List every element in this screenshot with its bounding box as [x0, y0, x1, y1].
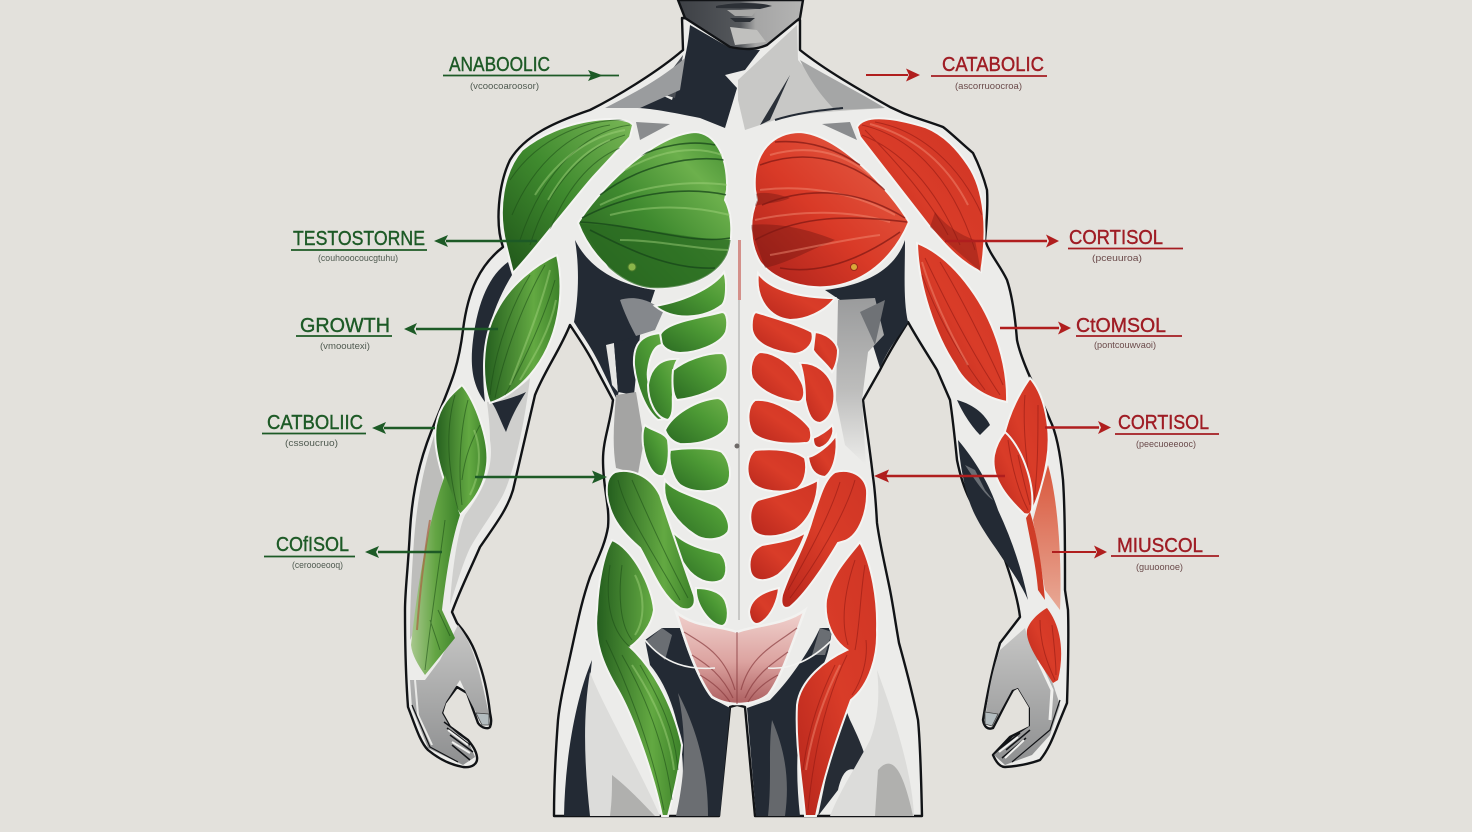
head — [678, 0, 803, 49]
label: Testostorne: TESTOSTORNE — [293, 228, 425, 250]
shading: torso — [574, 240, 908, 474]
label: Cortisol lower right — [1045, 412, 1219, 450]
label: Catbolic — [262, 412, 435, 449]
body silhouette — [405, 18, 1068, 816]
arrow: cortisol upper right — [945, 234, 1059, 248]
muscle: left pectoral — [578, 132, 732, 295]
label: Catabolic — [866, 54, 1047, 92]
label: Ciomsol: (pontcouwvaoi) — [1094, 340, 1156, 351]
arrow: miuscol — [1052, 546, 1107, 558]
muscle: left biceps — [484, 255, 560, 403]
shading: left arm — [410, 262, 530, 640]
label: Anabolic: (vcoocoaroosor) — [470, 81, 539, 92]
muscle: left upper forearm — [435, 385, 487, 515]
arrow: cortisol lower right — [1045, 421, 1111, 434]
nipple right — [850, 264, 858, 270]
shading: hips and legs — [564, 628, 914, 816]
label: Cortisol lower right: CORTISOL — [1118, 412, 1209, 434]
anatomical figure — [405, 0, 1068, 816]
shading: neck and shoulders — [605, 25, 885, 140]
arrow: ciomsol — [1000, 322, 1071, 334]
label: Testostorne — [291, 228, 537, 264]
muscle: abdominal segments left — [634, 272, 730, 626]
label: Catabolic: (ascorruoocroa) — [955, 81, 1022, 92]
muscle: right triceps — [917, 243, 1007, 402]
label: Catbolic: CATBOLIIC — [267, 412, 363, 434]
label: Growth: (vmooutexi) — [320, 341, 370, 352]
muscle: right deltoid — [857, 118, 985, 272]
label: Growth: GROWTH — [300, 315, 390, 337]
muscle: right lower forearm — [1026, 465, 1061, 683]
label: Catabolic: CATABOLIC — [942, 54, 1044, 76]
nipple left — [628, 263, 636, 271]
muscle: left deltoid — [502, 119, 633, 273]
label: Cortisol upper right — [945, 227, 1183, 264]
label: Miuscol: MIUSCOL — [1117, 535, 1203, 557]
label: Catbolic: (cssoucruo) — [285, 438, 338, 449]
arrow: cortisol left — [365, 546, 442, 558]
label: Growth — [296, 315, 498, 352]
icon: left hand — [410, 625, 489, 765]
shading: right arm — [957, 400, 1028, 600]
muscle: right oblique — [781, 471, 867, 608]
muscle: left thigh — [596, 540, 682, 816]
muscle: left oblique — [607, 471, 695, 609]
icon: right hand — [985, 628, 1060, 765]
arrow: green centre — [475, 470, 607, 484]
label: Testostorne: (couhooocoucgtuhu) — [318, 253, 398, 264]
arrow: testostorne — [434, 235, 537, 247]
arrow: catabolic — [866, 68, 920, 82]
label: Cortisol upper right: CORTISOL — [1069, 227, 1163, 249]
muscle: right thigh — [797, 542, 877, 816]
groin muscle — [645, 610, 832, 704]
arrow: red centre — [874, 470, 1005, 482]
label: Cortisol left: (ceroooeooq) — [292, 560, 343, 571]
label: Miuscol — [1052, 535, 1219, 573]
label: Cortisol left — [264, 534, 442, 571]
label: Miuscol: (guuoonoe) — [1136, 562, 1183, 573]
label: Anabolic — [443, 54, 619, 92]
label: Ciomsol — [1000, 315, 1182, 351]
label: Cortisol upper right: (pceuuroa) — [1092, 253, 1142, 264]
red muscles: catabolic side — [748, 118, 1061, 816]
green muscles: anabolic side — [411, 119, 732, 816]
arrow: growth — [404, 323, 498, 335]
label: Ciomsol: CtOMSOL — [1076, 315, 1166, 337]
muscle: right forearm — [993, 378, 1049, 515]
centre line — [734, 240, 741, 620]
muscle: right pectoral — [750, 132, 909, 287]
label: Anabolic: ANABOOLIC — [449, 54, 550, 76]
muscle: abdominal segments right — [748, 273, 838, 624]
arrow: anabolic — [443, 70, 619, 81]
label: Cortisol lower right: (peecuoeeooc) — [1136, 439, 1196, 450]
arrow: catbolic — [372, 422, 435, 434]
muscle: left lower forearm — [411, 475, 460, 675]
label: Cortisol left: COfISOL — [276, 534, 349, 556]
